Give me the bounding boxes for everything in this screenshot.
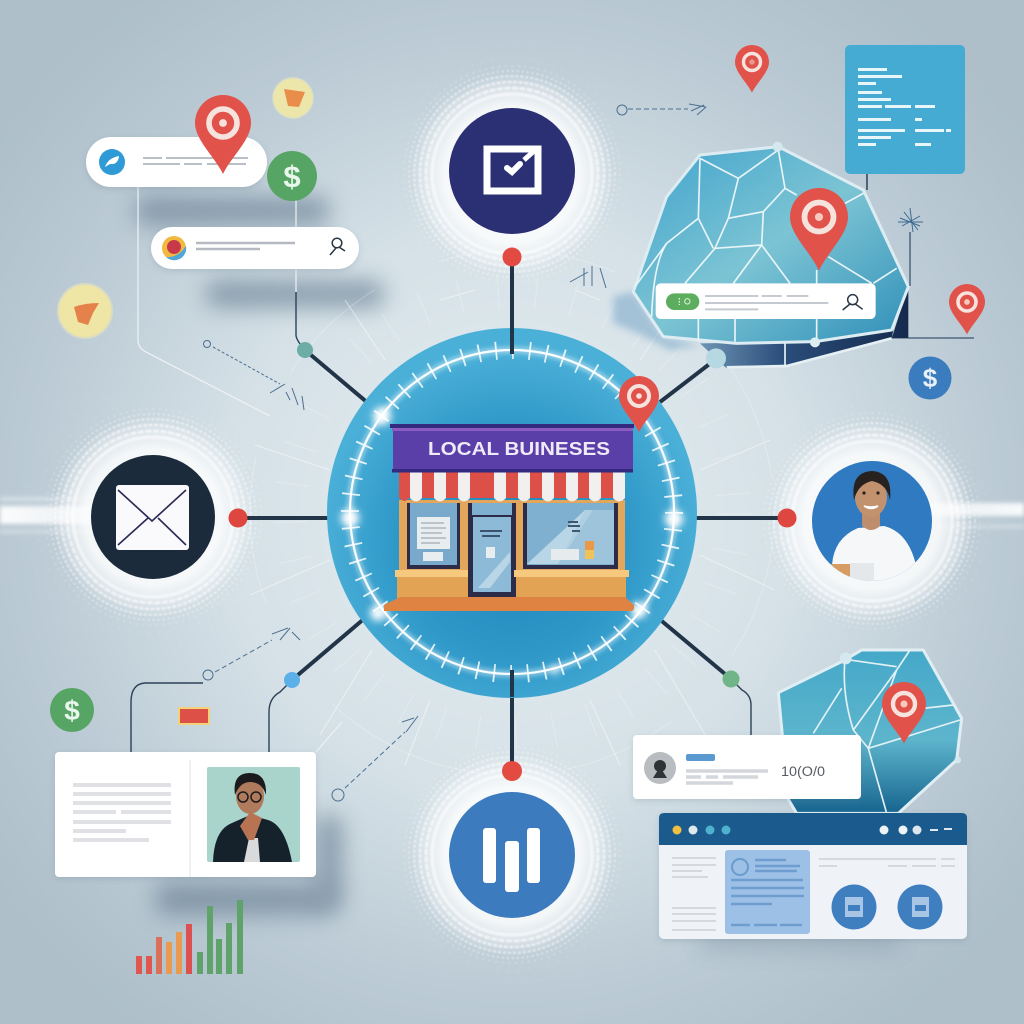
icon: three bars: [483, 828, 540, 892]
mini bar chart: [136, 900, 243, 974]
location pin: hub: [619, 376, 659, 432]
map nodes: [773, 142, 783, 152]
map soft shadow: [613, 292, 700, 350]
icon: bird: [99, 149, 125, 175]
map: upper right: [613, 142, 908, 368]
top right lines: [819, 859, 955, 866]
connector lines to hub: [247, 258, 780, 765]
sills and base: [384, 570, 634, 611]
dollar badge: blue: [908, 356, 952, 400]
arrow: lower centre dashed: [332, 716, 418, 801]
thin white and dark connectors: [131, 187, 751, 752]
search pill: lower: [151, 227, 359, 269]
small red tag: [179, 708, 209, 724]
map streets: [813, 650, 960, 813]
card number: 10(O/0: [781, 764, 825, 779]
map polygon: [633, 147, 908, 343]
location pin: map lower: [882, 682, 926, 744]
dollar badge: blue: $: [923, 363, 938, 393]
walls: [399, 500, 625, 572]
portrait: smiling woman: [830, 471, 916, 590]
location pin: upper left: [195, 95, 251, 174]
avatar: [644, 752, 676, 784]
search bar on map: [656, 283, 876, 319]
storefront: [384, 424, 634, 611]
blue content panel: [725, 850, 810, 934]
search pill: upper: [86, 137, 267, 187]
node: task checklist: [384, 46, 640, 302]
map dark base: [700, 287, 908, 368]
radial spokes and arcs around the hub: [250, 251, 775, 775]
arrow: upper left dashed: [204, 340, 304, 410]
text lines: [143, 158, 248, 164]
awning: [399, 472, 625, 502]
central hub circle: [327, 328, 697, 698]
map streets: [635, 150, 897, 367]
browser window: [659, 813, 967, 939]
horizontal light streaks: [0, 497, 1024, 533]
thin dashed arrows and scribbles: [203, 104, 706, 801]
portrait: man with glasses: [207, 767, 300, 862]
sidebar lines: [672, 858, 716, 930]
location pin: right: [949, 284, 985, 334]
icon: colored logo: [162, 236, 186, 260]
node: bar chart: [384, 727, 640, 983]
dollar badge: upper green: $: [283, 159, 301, 194]
ring glow points: [341, 407, 683, 674]
dollar badge: lower green: [50, 688, 94, 732]
scribble: above hub: [570, 266, 606, 288]
hub spoke ends: [510, 328, 514, 697]
icon: document one: [832, 884, 876, 930]
title: LOCAL BUINESES: [428, 439, 610, 459]
sign board: [390, 424, 634, 472]
door: [468, 503, 516, 597]
code lines: [858, 68, 951, 146]
soft drop shadows: [135, 196, 900, 949]
profile card: [55, 752, 316, 877]
axis line and starburst: [898, 208, 974, 338]
icon: user: [843, 295, 863, 310]
connector end dots: [228, 248, 796, 781]
icon: checkbox: [487, 149, 538, 191]
browser title bar: [659, 813, 967, 845]
food badge: left: [58, 284, 112, 338]
dollar badge: lower green: $: [64, 695, 80, 726]
icon: document two: [898, 884, 942, 930]
food badge: top: [273, 78, 313, 118]
arrow: lower left dashed: [203, 628, 300, 680]
location pin: map upper: [790, 188, 848, 271]
left window: [407, 503, 460, 569]
arrow: top right dashed: [617, 104, 706, 115]
map: lower right: [778, 650, 962, 813]
node: email: [25, 389, 281, 645]
icon: envelope: [116, 485, 189, 550]
node: person portrait: [768, 412, 981, 630]
contact card: [633, 735, 861, 799]
code panel: [845, 45, 965, 190]
dollar badge: upper green: [267, 151, 317, 201]
text lines: [73, 783, 171, 842]
icon: user: [330, 238, 345, 255]
right window: [523, 503, 618, 569]
glowing tick ring: [350, 350, 674, 674]
location pin: top: [735, 45, 769, 93]
